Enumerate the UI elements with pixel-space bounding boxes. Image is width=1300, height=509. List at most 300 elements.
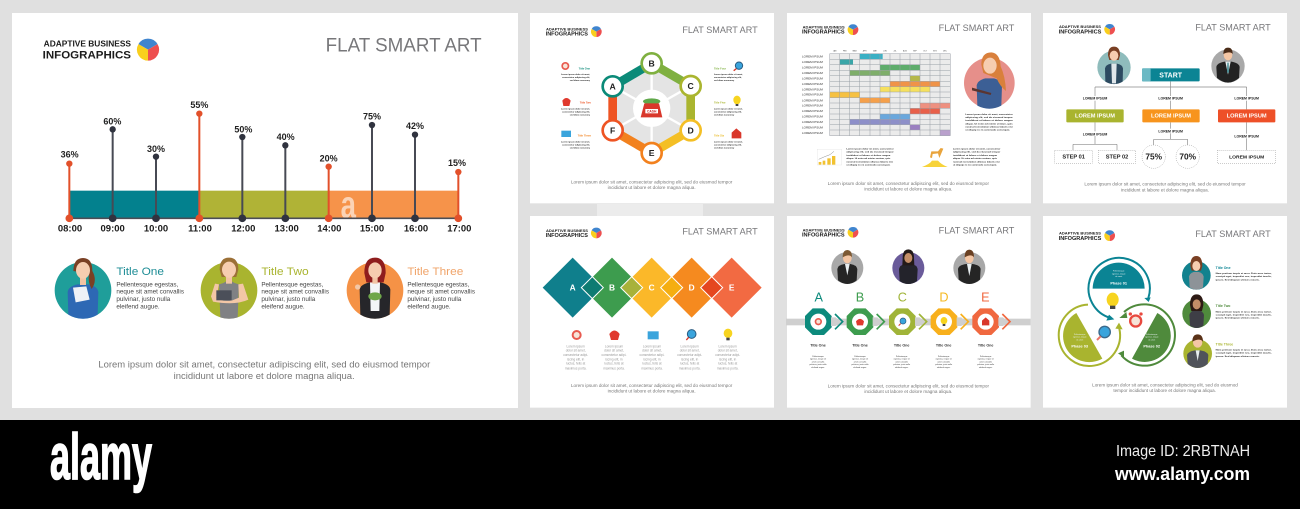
labels: LOREM IPSUM (1234, 135, 1259, 139)
step captions: eleifend augue. (811, 367, 825, 369)
text: growth description: incididunt ut labore et dolore magna (846, 154, 891, 157)
step c (889, 308, 927, 335)
step captions: pulvinar, justo nulla (893, 363, 911, 366)
icon captions: iscing elit, in (681, 357, 698, 361)
phase sectors: Pellentesque (1146, 333, 1158, 336)
timeline chart: 13:00 (275, 224, 299, 235)
panel: phase cycle slide (1043, 216, 1287, 408)
timeline chart: 40% (277, 132, 295, 142)
icons row (572, 329, 732, 340)
text: person one: ipsum. Sed aliquam ultrices mauris. (1216, 278, 1260, 281)
step e (972, 308, 1010, 335)
phase sectors: egestas, neque (1145, 336, 1159, 339)
right items: Lorem ipsum dolor sit amet, (714, 140, 743, 143)
gantt chart: LOREM IPSUM (802, 76, 823, 80)
gantt chart: LOREM IPSUM (802, 120, 823, 124)
footer text: incididunt ut labore et dolore magna aliqua. (608, 389, 696, 394)
left items: sed diam nonummy (570, 114, 591, 116)
step captions: pulvinar, justo nulla (810, 363, 827, 366)
step captions: Title One (852, 343, 868, 347)
timeline chart: 12:00 (231, 224, 255, 235)
step captions: eleifend augue. (979, 367, 993, 369)
text: person three (1216, 342, 1272, 358)
right items: Lorem ipsum dolor sit amet, (714, 73, 743, 76)
gantt chart: LOREM IPSUM (802, 93, 823, 97)
title: FLAT SMART ART (1195, 229, 1271, 239)
logo (802, 24, 858, 36)
timeline chart: 09:00 (101, 224, 125, 235)
timeline chart: 17:00 (447, 224, 471, 235)
phase sectors: Phase 02 (1143, 344, 1160, 348)
timeline chart: 15% (448, 158, 466, 168)
footer text: Lorem ipsum dolor sit amet, consectetur adipiscing elit, sed do eiusmod tempor (828, 383, 990, 388)
icon captions: iscing elit, in (719, 357, 736, 361)
icon captions: luctus, felis at (718, 362, 737, 366)
icon captions: Lorem ipsum (643, 344, 661, 348)
step letters: A (814, 290, 823, 304)
gantt chart: AUG (903, 49, 908, 52)
labels: LOREM IPSUM (1083, 132, 1107, 136)
phase sectors: Pellentesque (1074, 333, 1086, 336)
diamond row: D (689, 283, 695, 293)
icon: alarm clock (1129, 312, 1143, 328)
gantt chart: LOREM IPSUM (802, 82, 823, 86)
text: person two (1216, 304, 1272, 320)
step boxes and percentages: LOREM IPSUM (1229, 154, 1264, 160)
phase arcs (1059, 258, 1175, 366)
footer text: incididunt ut labore et dolore magna aliqua. (1121, 187, 1209, 192)
diamond row: A (570, 283, 576, 293)
step b (847, 308, 884, 335)
text: title three: eleifend augue. (407, 303, 451, 310)
footer text: Lorem ipsum dolor sit amet, consectetur adipiscing elit, sed do eiusmod (1092, 383, 1238, 388)
text: person one: Nam pretium turpis et arcu. Duis arcu tortor, (1216, 272, 1272, 275)
step letters: E (981, 290, 990, 304)
text: growth description: aliqua. Ut enim ad minim veniam, quis (846, 157, 891, 160)
text: horse description: Lorem ipsum dolor sit amet, consectetur (953, 148, 1001, 151)
icon: cash bag: CASH (647, 109, 657, 113)
phase sectors: egestas, neque (1073, 336, 1087, 339)
right items: Title Five (714, 101, 726, 105)
step captions: amet convallis (895, 360, 908, 363)
gantt chart: OCT (923, 50, 928, 52)
text: title two: Pellentesque egestas, (261, 282, 324, 289)
logo: INFOGRAPHICS (802, 232, 845, 238)
text: person three: Nam pretium turpis et arcu. Duis arcu tortor, (1216, 349, 1272, 352)
icon captions: maximus porta. (679, 367, 701, 371)
hexagon diagram (603, 53, 701, 163)
start box: START (1159, 72, 1183, 79)
footer text: incididunt ut labore et dolore magna aliqua. (864, 187, 952, 192)
gantt chart: LOREM IPSUM (802, 87, 823, 91)
icon captions: consectetur adipi- (563, 353, 588, 357)
logo (1059, 230, 1115, 242)
text: title three: Pellentesque egestas, (407, 282, 470, 289)
gantt chart: LOREM IPSUM (802, 60, 823, 64)
step captions: Pellentesque (854, 355, 867, 358)
left items: Title One (579, 66, 591, 70)
title: FLAT SMART ART (939, 226, 1015, 236)
text: woman description: aliqua. Ut enim ad minim veniam, quis (965, 122, 1014, 125)
person: title one (55, 258, 111, 319)
text: title three: pulvinar, justo nulla (407, 296, 462, 303)
coloured boxes: LOREM IPSUM (1075, 114, 1115, 120)
footer text: incididunt ut labore et dolore magna aliqua. (608, 185, 696, 190)
gantt chart (802, 49, 950, 136)
title: FLAT SMART ART (682, 25, 758, 35)
text: title two: neque sit amet convallis (261, 289, 329, 296)
icon captions: Lorem ipsum (605, 344, 623, 348)
gantt chart: MAY (873, 49, 878, 52)
person: title three (347, 258, 403, 319)
step captions: pulvinar, justo nulla (977, 363, 995, 366)
gantt chart: JUL (893, 50, 897, 52)
hexagon diagram: B (649, 58, 655, 68)
timeline chart: 20% (320, 153, 338, 163)
icon captions: consectetur adipi- (602, 353, 626, 357)
logo: INFOGRAPHICS (1059, 29, 1102, 35)
right items: consectetur adipiscing elit, (714, 110, 742, 113)
right items: sed diam nonummy (714, 80, 735, 82)
gantt chart: LOREM IPSUM (802, 104, 823, 108)
person: woman with notebook (964, 52, 1015, 109)
logo (1059, 24, 1115, 35)
step captions: amet convallis (854, 360, 866, 363)
right items: Title Six (714, 134, 725, 138)
step captions: egestas, neque sit (936, 358, 952, 361)
step captions: Pellentesque (812, 355, 825, 358)
website: www.alamy.com (1114, 464, 1250, 484)
text: horse description (953, 148, 1001, 167)
timeline chart: 11:00 (188, 224, 212, 235)
icon captions: luctus, felis at (566, 362, 585, 366)
text: person two: ipsum. Sed aliquam ultrices mauris. (1216, 317, 1260, 320)
left items: sed diam nonummy (570, 80, 591, 82)
step captions: egestas, neque sit (978, 358, 994, 361)
step captions: amet convallis (812, 360, 824, 363)
icon captions: luctus, felis at (680, 362, 699, 366)
right items: consectetur adipiscing elit, (714, 76, 742, 79)
text: title one: neque sit amet convallis (116, 289, 184, 296)
text: horse description: ut aliquip ex ea commodo consequat. (953, 164, 997, 167)
logo: ADAPTIVE BUSINESS (1059, 231, 1101, 236)
person: woman (1097, 47, 1131, 84)
timeline chart: 42% (406, 121, 424, 131)
left items: Lorem ipsum dolor sit amet, (561, 140, 590, 143)
left items: sed diam nonummy (570, 147, 591, 149)
alamy logo: alamy (50, 420, 152, 493)
text: woman description: incididunt ut labore et dolore magna (965, 119, 1014, 122)
gantt chart: LOREM IPSUM (802, 115, 823, 119)
person: man (1211, 48, 1245, 83)
person: title three (1183, 334, 1212, 368)
icon captions: consectetur adipi- (677, 353, 702, 357)
hexagon diagram: C (688, 81, 695, 91)
text: title one: Pellentesque egestas, (116, 282, 179, 289)
text: horse description: incididunt ut labore et dolore magna (953, 154, 998, 157)
title: FLAT SMART ART (939, 23, 1015, 33)
stock photo footer band (0, 420, 1300, 509)
gantt chart: LOREM IPSUM (802, 109, 823, 113)
right items (714, 62, 743, 149)
text: growth description: ut aliquip ex ea commodo consequat. (846, 164, 891, 167)
text: person one (1216, 266, 1272, 281)
left items: Lorem ipsum dolor sit amet, (561, 107, 590, 110)
step captions (810, 343, 995, 369)
left items: consectetur adipiscing elit, (562, 110, 590, 113)
left items: Title Two (580, 101, 591, 105)
gantt chart: LOREM IPSUM (802, 131, 823, 135)
step captions: pulvinar, justo nulla (935, 363, 953, 366)
text: title two: pulvinar, justo nulla (261, 296, 316, 303)
logo: ADAPTIVE BUSINESS (803, 25, 845, 30)
text: person two: suscipit eget, imperdiet nec, imperdiet iaculis, (1216, 313, 1272, 316)
gantt chart: LOREM IPSUM (802, 66, 823, 70)
timeline chart (58, 100, 471, 235)
gantt chart: JAN (833, 49, 837, 52)
icon captions (563, 344, 740, 371)
person: title one (1182, 256, 1211, 290)
gantt chart: LOREM IPSUM (802, 71, 823, 75)
logo: INFOGRAPHICS (546, 233, 588, 239)
step captions: Pellentesque (980, 355, 992, 358)
icon captions: iscing elit, in (567, 357, 585, 361)
text: title one: pulvinar, justo nulla (116, 296, 171, 303)
icon captions: dolor sit amet, (604, 348, 624, 352)
text: person two: Nam pretium turpis et arcu. Duis arcu tortor, (1216, 310, 1272, 313)
start box (1142, 68, 1200, 81)
step captions: eleifend augue. (937, 367, 951, 369)
title: FLAT SMART ART (682, 226, 758, 236)
icon captions: dolor sit amet, (680, 348, 700, 352)
icon captions: maximus porta. (565, 367, 587, 371)
step a (805, 308, 843, 335)
right items: sed diam nonummy (714, 147, 735, 149)
gantt chart: DEC (943, 50, 948, 52)
hexagon diagram: E (649, 148, 655, 158)
text: title two: Title Two (261, 266, 309, 278)
panel: process timeline slide (786, 216, 1031, 408)
right items: sed diam nonummy (714, 114, 735, 116)
icon captions: maximus porta. (641, 367, 663, 371)
gantt chart: LOREM IPSUM (802, 98, 823, 102)
labels: LOREM IPSUM (1158, 97, 1183, 101)
labels (1080, 96, 1262, 139)
text: title one (116, 266, 184, 310)
icon captions: Lorem ipsum (567, 344, 585, 348)
step captions: Pellentesque (896, 355, 908, 358)
hexagon diagram: A (610, 81, 617, 91)
gantt chart: NOV (933, 50, 938, 52)
footer text (1084, 182, 1246, 192)
text: woman description: ut aliquip ex ea commodo consequat. (965, 129, 1010, 132)
step letters: D (939, 290, 949, 304)
step captions: egestas, neque sit (852, 358, 868, 361)
text: person three: suscipit eget, imperdiet nec, imperdiet iaculis, (1216, 352, 1272, 355)
step captions: Title One (810, 343, 826, 347)
text: title one: eleifend augue. (116, 303, 160, 310)
timeline chart: 08:00 (58, 224, 82, 235)
gantt chart: JUN (883, 50, 887, 52)
text: title three (407, 266, 475, 310)
step boxes and percentages: STEP 01 (1062, 155, 1085, 161)
coloured boxes: LOREM IPSUM (1227, 114, 1267, 120)
title: FLAT SMART ART (1195, 23, 1271, 33)
diamond row: C (649, 283, 655, 293)
step captions: Title One (894, 343, 909, 347)
text: woman description: adipiscing elit, sed do eiusmod tempor (965, 116, 1013, 119)
phase sectors: sit amet (1148, 338, 1156, 341)
phase sectors: Phase 01 (1110, 281, 1128, 285)
phase sectors: egestas, neque (1112, 272, 1126, 275)
footer text (98, 360, 430, 381)
timeline chart: 10:00 (144, 224, 168, 235)
timeline chart: 14:00 (317, 224, 341, 235)
person: title two (201, 258, 257, 319)
people (831, 249, 985, 284)
timeline chart: 16:00 (404, 224, 428, 235)
step captions: egestas, neque sit (810, 358, 827, 361)
gantt chart: APR (863, 49, 867, 52)
text: growth description (846, 148, 894, 167)
footer text: Lorem ipsum dolor sit amet, consectetur adipiscing elit, sed do eiusmod tempor (828, 181, 990, 186)
text: horse description: adipiscing elit, sed do eiusmod tempor (953, 151, 1001, 154)
step d (931, 308, 968, 335)
text: title two: eleifend augue. (261, 303, 305, 310)
step captions: amet convallis (979, 360, 992, 363)
gray band (786, 319, 1031, 325)
labels: LOREM IPSUM (1083, 97, 1107, 101)
footer text: tempor incididunt ut labore et dolore magna aliqua. (1113, 388, 1216, 393)
logo: ADAPTIVE BUSINESS (546, 228, 588, 233)
step captions: Title One (978, 343, 993, 347)
text: title three: Title Three (407, 266, 463, 278)
timeline chart: 75% (363, 112, 381, 122)
person: title two (1182, 294, 1211, 328)
footer text: Lorem ipsum dolor sit amet, consectetur adipiscing elit, sed do eiusmod tempor (571, 179, 733, 184)
step boxes and percentages: STEP 02 (1106, 155, 1128, 161)
icon: bulb (1107, 293, 1119, 309)
icon: growth chart (817, 149, 842, 165)
text: woman description: Lorem ipsum dolor sit amet, consectetur (965, 113, 1013, 116)
footer text: Lorem ipsum dolor sit amet, consectetur adipiscing elit, sed do eiusmod tempor (98, 360, 430, 370)
step boxes and percentages: 70% (1179, 152, 1197, 162)
labels: LOREM IPSUM (1158, 130, 1183, 134)
image id: Image ID: 2RBTNAH (1116, 443, 1250, 460)
timeline chart: 50% (234, 124, 252, 134)
footer text (571, 179, 733, 190)
text: person three: Title Three (1216, 342, 1233, 346)
gantt chart: FEB (843, 50, 847, 52)
step boxes and percentages (1055, 145, 1276, 168)
icon captions: dolor sit amet, (642, 348, 662, 352)
hexagon diagram: F (610, 125, 615, 135)
text: growth description: Lorem ipsum dolor sit amet, consectetur (846, 148, 894, 151)
step captions: egestas, neque sit (894, 358, 910, 361)
left items: consectetur adipiscing elit, (562, 143, 590, 146)
step captions: Title One (936, 343, 951, 347)
labels: LOREM IPSUM (1234, 97, 1259, 101)
phase sectors: sit amet (1076, 338, 1084, 341)
connector lines (1073, 81, 1247, 150)
icon captions: consectetur adipi- (640, 353, 664, 357)
footer text (571, 383, 733, 394)
text: title three: neque sit amet convallis (407, 289, 475, 296)
left items (561, 62, 592, 149)
footer text: incididunt ut labore et dolore magna aliqua. (864, 389, 952, 394)
timeline chart: 36% (61, 150, 79, 160)
icon: horse on coins (922, 148, 948, 167)
timeline chart: 60% (103, 117, 121, 127)
logo: INFOGRAPHICS (802, 30, 845, 36)
gantt chart: SEP (913, 50, 918, 52)
text: growth description: adipiscing elit, sed do eiusmod tempor (846, 151, 894, 154)
diamond row: B (609, 283, 615, 293)
footer text: incididunt ut labore et dolore magna aliqua. (174, 371, 355, 381)
icon captions: consectetur adipi- (715, 353, 740, 357)
icon captions: dolor sit amet, (718, 348, 738, 352)
footer text (828, 181, 990, 192)
icon captions: iscing elit, in (643, 357, 661, 361)
text: woman description (965, 113, 1014, 132)
text: woman description: nostrud exercitation ullamco laboris nisi (965, 125, 1013, 128)
step captions: Pellentesque (938, 355, 950, 358)
logo: INFOGRAPHICS (546, 32, 588, 38)
footer text: Lorem ipsum dolor sit amet, consectetur adipiscing elit, sed do eiusmod tempor (571, 383, 733, 388)
icon captions: luctus, felis at (604, 362, 624, 366)
logo: ADAPTIVE BUSINESS (1059, 24, 1101, 29)
panel: hexagon cycle slide (530, 13, 774, 203)
right items: Title Four (714, 66, 726, 70)
text: horse description: nostrud exercitation ullamco laboris nisi (953, 160, 1000, 163)
step captions: eleifend augue. (895, 367, 909, 369)
text: title two (261, 266, 329, 310)
panel: diamonds slide (530, 216, 774, 408)
left items: consectetur adipiscing elit, (562, 76, 590, 79)
diamond row (543, 258, 762, 318)
phase sectors: Pellentesque (1113, 270, 1125, 273)
icon captions: Lorem ipsum (681, 344, 699, 348)
icon captions: luctus, felis at (642, 362, 662, 366)
timeline chart: a (341, 183, 356, 226)
coloured boxes: LOREM IPSUM (1151, 114, 1191, 120)
logo: INFOGRAPHICS (43, 49, 131, 61)
step boxes and percentages: 75% (1145, 152, 1163, 162)
text: person one: suscipit eget, imperdiet nec, imperdiet iaculis, (1216, 275, 1272, 278)
panel: flow chart slide (1043, 13, 1287, 203)
footer text: Lorem ipsum dolor sit amet, consectetur adipiscing elit, sed do eiusmod tempor (1084, 182, 1246, 187)
panel: timeline chart slide (12, 13, 518, 408)
gantt chart: LOREM IPSUM (802, 125, 823, 129)
diamond row: E (729, 283, 735, 293)
panel: gantt slide (787, 13, 1031, 203)
logo (802, 227, 858, 238)
step letters: B (856, 290, 864, 304)
icon captions: iscing elit, in (605, 357, 623, 361)
timeline chart: 15:00 (360, 224, 384, 235)
left items: Title Three (578, 134, 592, 138)
text: person three: ipsum. Sed aliquam ultrices mauris. (1216, 355, 1260, 358)
text: person two: Title Two (1216, 304, 1230, 308)
text: title one: Title One (116, 266, 164, 278)
left items: Lorem ipsum dolor sit amet, (561, 73, 590, 76)
icon captions: maximus porta. (603, 367, 625, 371)
logo (546, 228, 602, 239)
text: growth description: nostrud exercitation ullamco laboris nisi (846, 160, 893, 163)
coloured boxes (1066, 109, 1275, 122)
step captions: eleifend augue. (853, 367, 867, 369)
step captions: amet convallis (937, 360, 950, 363)
